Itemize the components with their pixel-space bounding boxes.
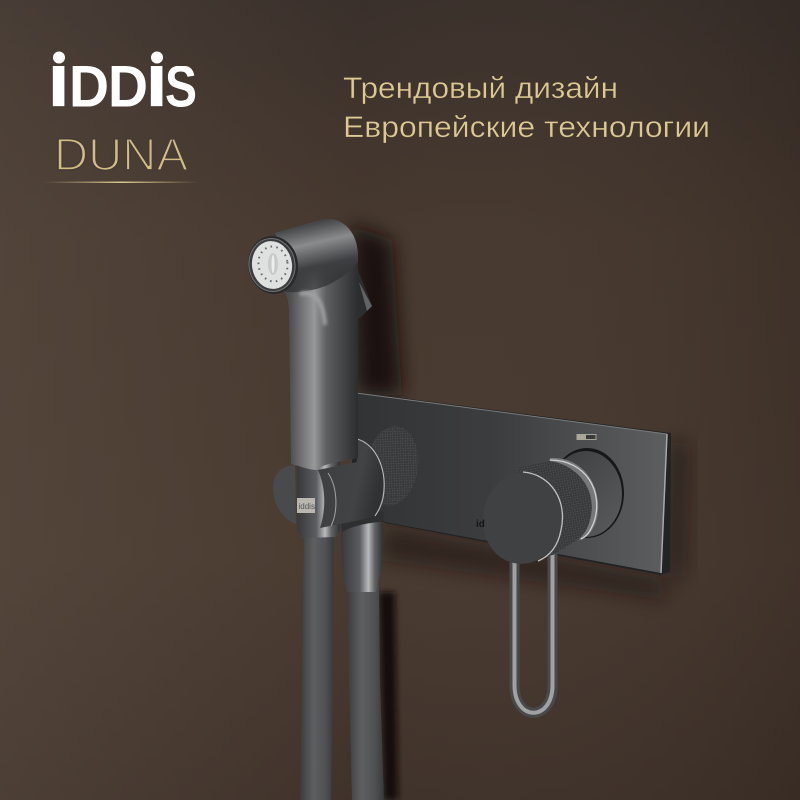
gold divider	[44, 182, 199, 183]
brand logo: IDDIS: S	[165, 54, 197, 120]
hose left	[300, 530, 334, 800]
front disc	[476, 466, 570, 570]
handset	[244, 219, 372, 470]
tagline: Европейские технологии	[343, 111, 710, 144]
tagline	[343, 72, 710, 144]
right handle	[476, 448, 624, 713]
brand logo: IDDIS: D	[108, 54, 148, 120]
holder bracket	[273, 439, 384, 528]
shiny band	[540, 458, 598, 540]
product: bidet mixer set	[244, 219, 690, 800]
lower collar	[341, 512, 384, 592]
hose right	[347, 585, 384, 800]
back cylinder	[550, 448, 624, 538]
left knob	[361, 423, 423, 509]
brand logo: IDDIS	[52, 52, 196, 107]
spray face	[244, 233, 302, 297]
trigger	[356, 265, 372, 318]
spray nozzles	[256, 245, 290, 283]
wall plate	[350, 392, 671, 575]
wall shadows	[352, 225, 690, 800]
handset body	[274, 219, 358, 470]
series name: DUNA: DUNA	[54, 129, 188, 180]
head highlight	[274, 219, 358, 292]
brand logo: IDDIS: D	[69, 54, 109, 120]
brand logo: IDDIS: i	[47, 30, 70, 124]
holder label: iddis	[298, 502, 315, 511]
handset grip	[297, 460, 340, 538]
knurled barrel	[517, 461, 592, 560]
plate mark: id	[476, 519, 485, 530]
brand logo: IDDIS: i	[145, 30, 168, 124]
tagline: Трендовый дизайн	[343, 72, 618, 105]
handle loop	[514, 550, 552, 713]
